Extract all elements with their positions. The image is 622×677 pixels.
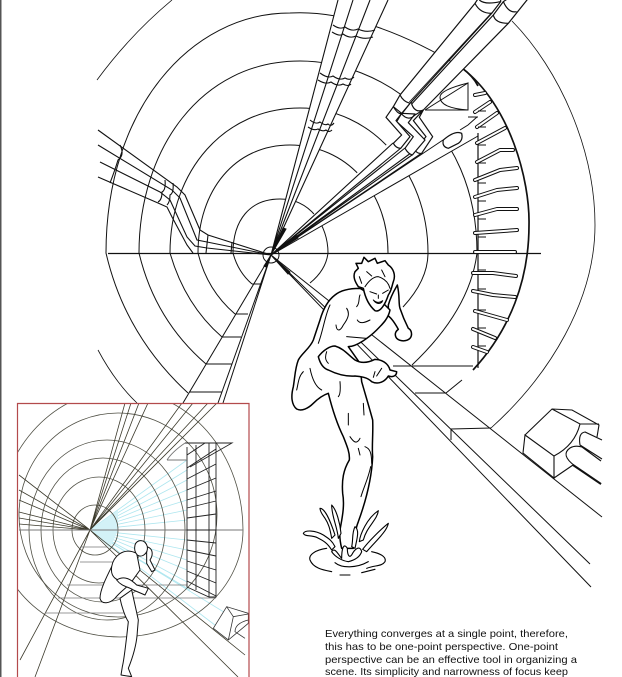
elbow three (413, 110, 433, 153)
inset converging lines (19, 403, 245, 677)
caption text: perspective can be an effective tool in organizing a (325, 654, 577, 666)
body and legs (292, 288, 390, 548)
lower pipe (412, 0, 528, 111)
pipe capsule (443, 132, 462, 148)
caption text (325, 628, 577, 677)
inset red frame (18, 404, 249, 677)
floor walkway, left (183, 255, 271, 403)
front arm and fist (318, 346, 397, 383)
blue construction fan (90, 460, 224, 626)
leaping superhero figure (292, 257, 412, 575)
wall section with rungs (271, 68, 517, 368)
horizon line (108, 252, 541, 254)
water splash (303, 505, 388, 575)
muscle lines (297, 295, 382, 497)
inset manikin (100, 541, 155, 677)
converging lines from right pipes (271, 136, 478, 255)
far arm (388, 285, 412, 341)
head and hair (354, 257, 394, 311)
concentric tunnel rings (97, 0, 595, 428)
floor walkway, right (271, 255, 602, 587)
inset wall grid (167, 443, 232, 597)
caption text: Everything converges at a single point, therefore, (325, 628, 568, 640)
overhead pipes, left (98, 130, 271, 255)
vanishing point (263, 228, 298, 274)
caption text: this has to be one-point perspective. One-point (325, 641, 558, 653)
inset rings (18, 404, 244, 638)
elbow one (386, 107, 410, 148)
inset box (213, 607, 248, 640)
main scene: tunnel in one-point perspective (97, 0, 602, 587)
overhead pipes, centre (271, 0, 388, 255)
inset: construction diagram (18, 404, 248, 677)
overhead pipes, right with elbows (386, 0, 528, 155)
upper pipe (400, 0, 501, 103)
elbow two (397, 113, 425, 155)
machine block, lower right (523, 409, 602, 485)
